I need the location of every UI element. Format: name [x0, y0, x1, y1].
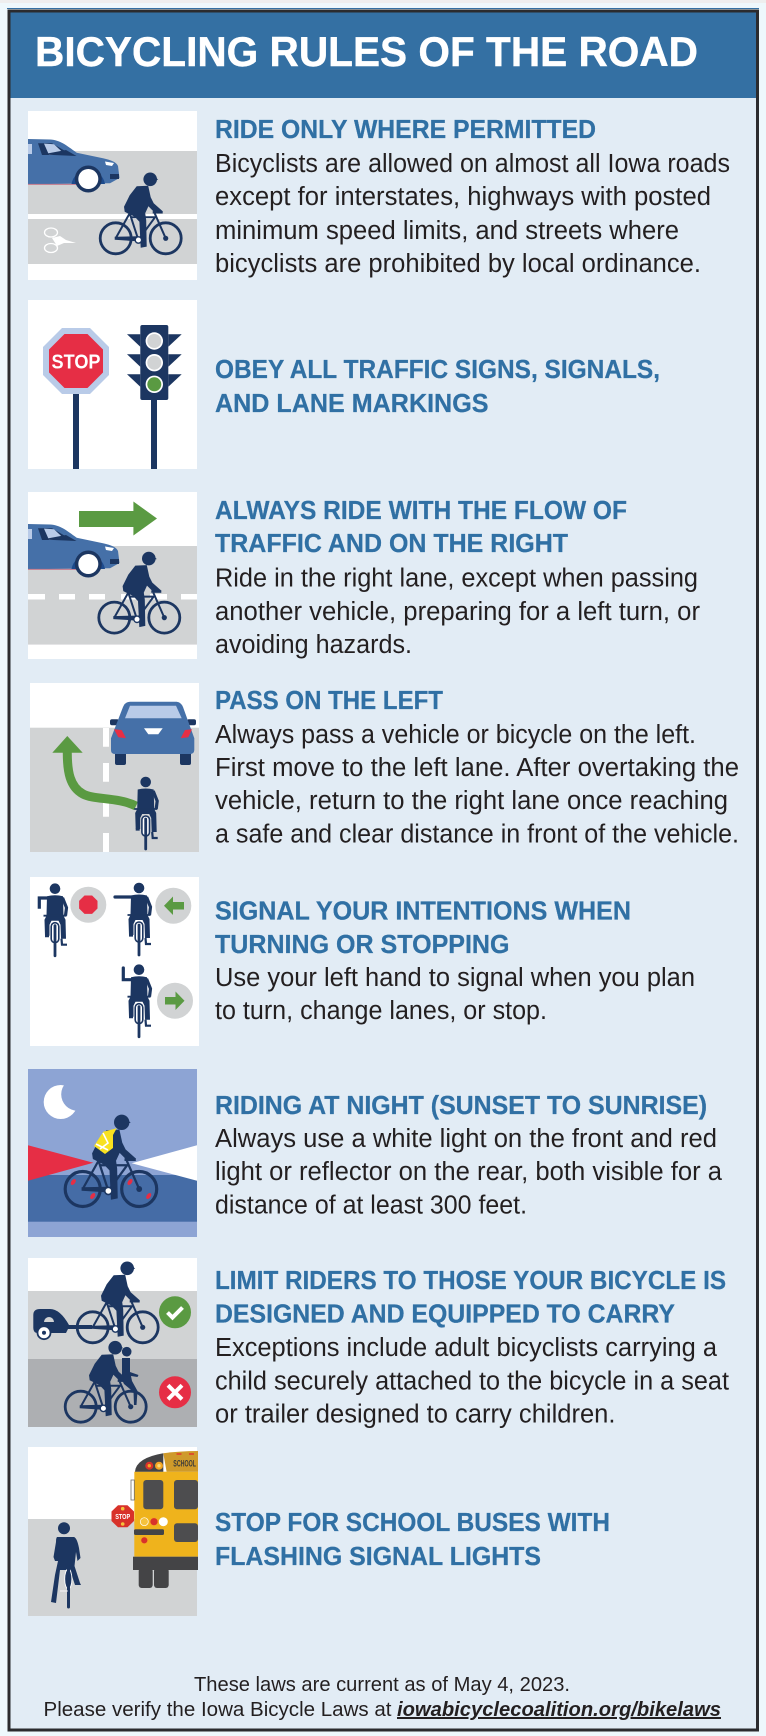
- body text: avoiding hazards.: [215, 631, 412, 659]
- heading: STOP FOR SCHOOL BUSES WITH: [215, 1509, 610, 1537]
- footer note: iowabicyclecoalition.org/bikelaws: [397, 1699, 721, 1721]
- icon: stop sign and traffic light: STOP: [52, 351, 100, 373]
- body text: [215, 1125, 723, 1220]
- icon: stop sign and traffic light: [28, 300, 197, 469]
- body text: a safe and clear distance in front of the vehicle.: [215, 820, 739, 848]
- title: BICYCLING RULES OF THE ROAD: [35, 28, 698, 75]
- heading: TURNING OR STOPPING: [215, 931, 510, 959]
- heading: RIDE ONLY WHERE PERMITTED: [215, 116, 596, 144]
- heading: [215, 356, 660, 418]
- body text: bicyclists are prohibited by local ordinance.: [215, 250, 701, 278]
- icon: night cyclist with lights: [28, 1069, 197, 1237]
- body text: vehicle, return to the right lane once reaching: [215, 787, 728, 815]
- body text: Bicyclists are allowed on almost all Iowa roads: [215, 150, 730, 178]
- title banner: [10, 12, 756, 98]
- panel: ride with flow of traffic: [28, 492, 701, 659]
- heading: DESIGNED AND EQUIPPED TO CARRY: [215, 1300, 675, 1328]
- body text: Always use a white light on the front and red: [215, 1125, 717, 1153]
- icon: cyclist stopped behind school bus: [28, 1447, 198, 1616]
- heading: TRAFFIC AND ON THE RIGHT: [215, 530, 568, 558]
- icon: car, cyclist and green arrow: [28, 492, 197, 659]
- body text: distance of at least 300 feet.: [215, 1192, 527, 1220]
- heading: SIGNAL YOUR INTENTIONS WHEN: [215, 898, 631, 926]
- body text: except for interstates, highways with posted: [215, 183, 711, 211]
- panel: obey signs: [28, 300, 660, 469]
- body text: [215, 150, 730, 278]
- body text: Ride in the right lane, except when passing: [215, 564, 698, 592]
- body text: another vehicle, preparing for a left turn, or: [215, 598, 701, 626]
- body text: First move to the left lane. After overtaking the: [215, 754, 739, 782]
- panel: limit riders: [28, 1258, 729, 1429]
- body text: light or reflector on the rear, both visible for a: [215, 1158, 723, 1186]
- heading: OBEY ALL TRAFFIC SIGNS, SIGNALS,: [215, 356, 660, 384]
- body text: [215, 564, 701, 659]
- heading: RIDING AT NIGHT (SUNSET TO SUNRISE): [215, 1092, 707, 1120]
- body text: minimum speed limits, and streets where: [215, 217, 679, 245]
- heading: PASS ON THE LEFT: [215, 687, 443, 715]
- icon: three hand signals: [30, 877, 199, 1046]
- heading: FLASHING SIGNAL LIGHTS: [215, 1543, 541, 1571]
- body text: to turn, change lanes, or stop.: [215, 997, 547, 1025]
- panel: riding at night: [28, 1069, 723, 1237]
- icon: bicycle with trailer and bicycle with passenger: [28, 1258, 197, 1427]
- footer note: [44, 1674, 721, 1721]
- heading: [215, 1509, 610, 1571]
- panel: pass on the left: [30, 683, 739, 852]
- panel: ride only where permitted: [28, 111, 730, 280]
- icon: cyclist stopped behind school bus: SCHOOL: [173, 1459, 196, 1469]
- body text: Use your left hand to signal when you plan: [215, 964, 695, 992]
- body text: or trailer designed to carry children.: [215, 1401, 616, 1429]
- icon: cyclist stopped behind school bus: STOP: [115, 1512, 130, 1521]
- body text: Exceptions include adult bicyclists carrying a: [215, 1334, 718, 1362]
- body text: [215, 721, 739, 848]
- heading: LIMIT RIDERS TO THOSE YOUR BICYCLE IS: [215, 1267, 726, 1295]
- icon: car and cyclist beside bike lane: [28, 111, 197, 280]
- icon: cyclist passing car on the left: [30, 683, 199, 852]
- footer note: Please verify the Iowa Bicycle Laws at: [44, 1699, 392, 1721]
- body text: child securely attached to the bicycle in a seat: [215, 1368, 729, 1396]
- heading: ALWAYS RIDE WITH THE FLOW OF: [215, 497, 627, 525]
- heading: AND LANE MARKINGS: [215, 390, 488, 418]
- panel: signal your intentions: [30, 877, 695, 1046]
- body text: [215, 1334, 729, 1429]
- heading: [215, 898, 631, 959]
- panel: stop for school buses: [28, 1447, 610, 1616]
- footer note: These laws are current as of May 4, 2023.: [194, 1674, 570, 1696]
- body text: Always pass a vehicle or bicycle on the left.: [215, 721, 696, 749]
- heading: [215, 497, 627, 558]
- body text: [215, 964, 695, 1025]
- heading: [215, 1267, 726, 1328]
